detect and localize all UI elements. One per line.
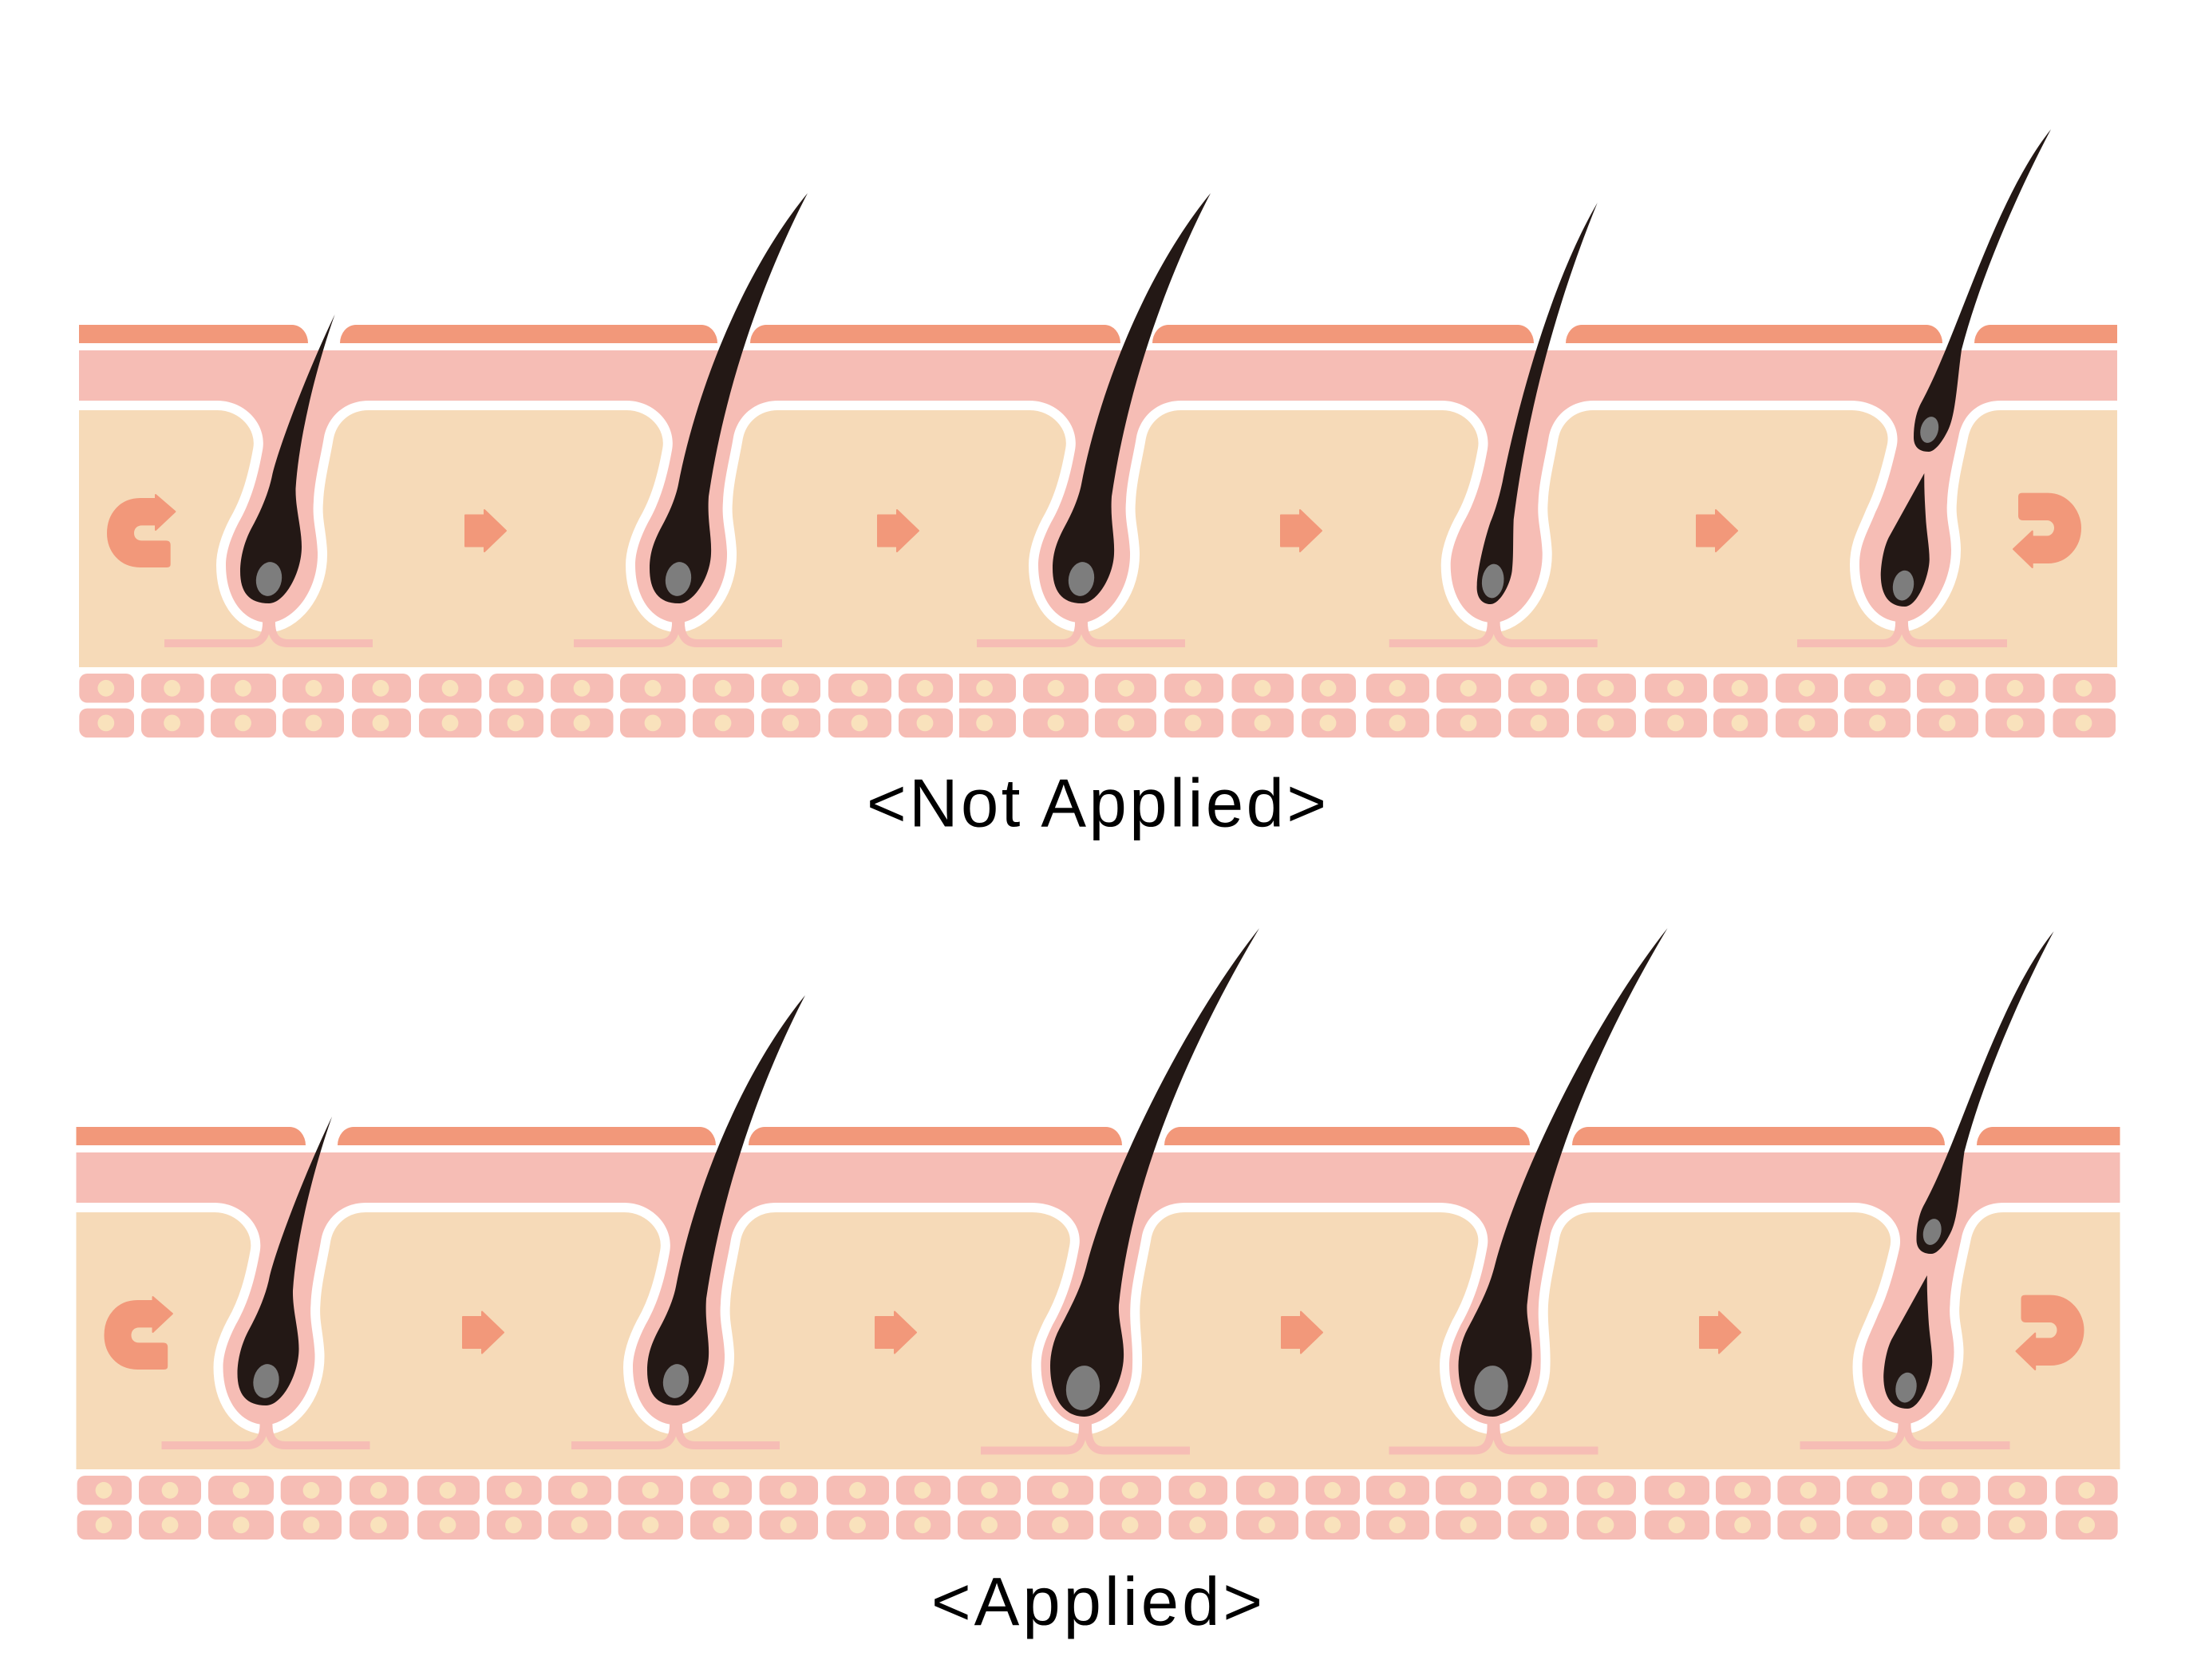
epidermis surface band xyxy=(79,325,2117,343)
white membrane strip xyxy=(77,1203,2120,1212)
cell row 2 xyxy=(77,1510,2118,1540)
upper dermis band xyxy=(79,350,2117,401)
nerve 5 xyxy=(1797,619,2007,643)
cell row 1 xyxy=(77,1476,2118,1505)
cell row 1 xyxy=(79,674,2116,702)
nerve 3 xyxy=(981,1421,1190,1451)
icon: curved end arrow xyxy=(2016,1296,2083,1370)
follicle sheath 5 xyxy=(1845,1195,2013,1424)
follicle sheath 1 xyxy=(209,393,377,623)
follicle sheath 5 xyxy=(1842,393,2009,622)
epidermis surface band xyxy=(77,1127,2120,1145)
subcutaneous cell layer xyxy=(79,674,2116,737)
arrow 1 xyxy=(465,510,506,551)
icon: curved start arrow xyxy=(105,1297,172,1369)
hair 3: thick long hair xyxy=(1050,928,1259,1417)
hair 2 xyxy=(650,193,808,603)
cell row 2 xyxy=(79,709,2116,737)
subcutaneous cell layer xyxy=(77,1476,2118,1540)
hair 2 xyxy=(647,995,805,1405)
follicle sheath 3 xyxy=(1021,1195,1193,1425)
nerve 4 xyxy=(1389,1421,1598,1451)
hair 3 xyxy=(1053,193,1211,603)
follicle sheath 4 xyxy=(1430,1195,1601,1425)
nerve lines xyxy=(164,619,2007,643)
arrow 4 xyxy=(1697,510,1737,551)
hair 4: thick long hair xyxy=(1459,928,1668,1417)
arrow 3 xyxy=(1281,510,1322,551)
nerve 5 xyxy=(1800,1421,2009,1445)
arrow 2 xyxy=(878,510,919,551)
nerve 1 xyxy=(161,1421,370,1445)
nerve lines xyxy=(161,1421,2009,1451)
icon: curved end arrow xyxy=(2013,494,2080,567)
hair 1 xyxy=(240,314,335,603)
hair 4 xyxy=(1477,203,1598,604)
follicle sheath 1 xyxy=(206,1195,373,1425)
panel: applied skin diagram xyxy=(77,928,2120,1540)
follicle sheath 2 xyxy=(616,1195,784,1425)
upper dermis band xyxy=(77,1152,2120,1203)
hair 5: shedding club hair and new hair xyxy=(1881,129,2051,607)
hair 5: shedding club hair and new hair xyxy=(1883,931,2054,1409)
hair 1 xyxy=(238,1117,332,1405)
follicle sheath 2 xyxy=(618,393,786,623)
caption: not applied: <Not Applied> xyxy=(867,766,1326,841)
follicle sheath 4 xyxy=(1434,393,1602,623)
caption: applied: <Applied> xyxy=(931,1564,1262,1640)
arrow 1 xyxy=(463,1312,504,1354)
arrow 3 xyxy=(1282,1312,1322,1354)
nerve 1 xyxy=(164,619,373,643)
arrow 2 xyxy=(875,1312,916,1354)
arrow 4 xyxy=(1700,1312,1741,1354)
nerve 4 xyxy=(1389,619,1598,643)
nerve 3 xyxy=(977,619,1185,643)
nerve 2 xyxy=(574,619,782,643)
dermis background xyxy=(77,1212,2120,1469)
follicle sheaths xyxy=(206,1195,2013,1425)
dermis background xyxy=(79,410,2117,667)
panel: not applied skin diagram xyxy=(79,129,2117,737)
icon: curved start arrow xyxy=(108,495,175,567)
white membrane strip xyxy=(79,401,2117,410)
follicle sheaths xyxy=(209,393,2009,623)
nerve 2 xyxy=(571,1421,780,1445)
follicle sheath 3 xyxy=(1021,393,1189,623)
